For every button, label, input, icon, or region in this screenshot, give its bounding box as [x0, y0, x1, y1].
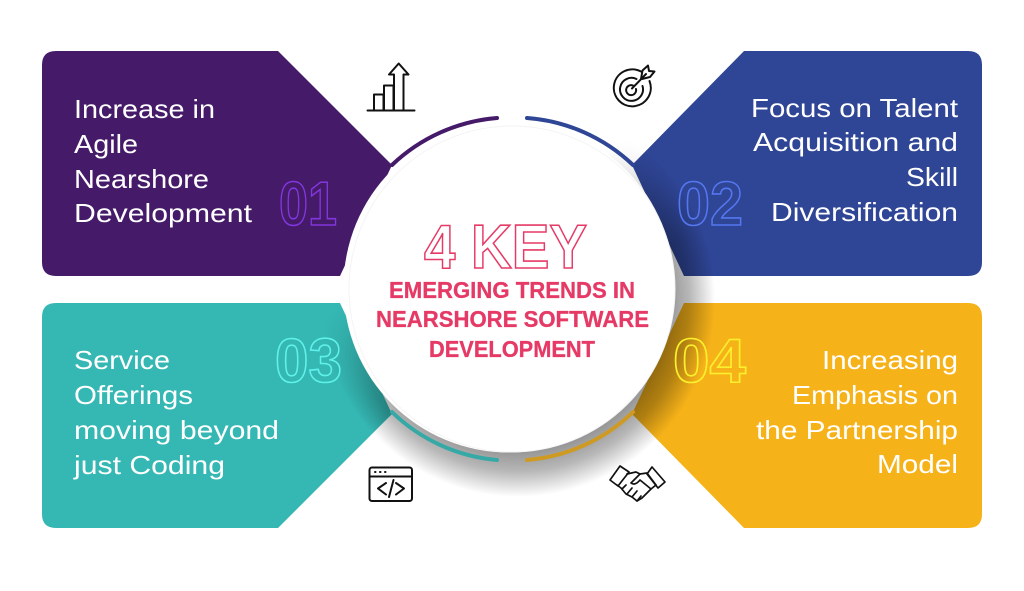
- number 03: 03: [275, 327, 342, 396]
- text: trend 04: Model: [877, 449, 958, 479]
- text: trend 01: [74, 94, 253, 228]
- panel: trend 02 blue: [632, 51, 982, 276]
- icon: target: [614, 66, 654, 106]
- text: trend 02: Skill: [906, 162, 958, 192]
- text: trend 02: Focus on Talent: [751, 93, 959, 123]
- center circle: [344, 122, 674, 452]
- text: trend 01: Agile: [74, 129, 138, 159]
- icon: handshake: [610, 466, 665, 501]
- inner circle ring: [349, 126, 675, 452]
- text: trend 02: Diversification: [771, 197, 958, 227]
- panel: trend 01 purple: [42, 51, 392, 276]
- text: trend 03: just Coding: [73, 450, 225, 480]
- icon: growth chart: [368, 64, 414, 110]
- heading: emerging trends: NEARSHORE SOFTWARE: [376, 306, 649, 332]
- icon: code window: [370, 468, 412, 501]
- circle shadow: [341, 158, 712, 494]
- text: trend 02: Acquisition and: [753, 127, 958, 157]
- number 01: 01: [279, 170, 337, 239]
- title: 4 KEY: 4 KEY: [424, 213, 587, 282]
- text: trend 01: Nearshore: [74, 164, 209, 194]
- heading: emerging trends: DEVELOPMENT: [429, 336, 595, 362]
- text: trend 01: Development: [74, 198, 253, 228]
- number 04: 04: [673, 327, 747, 396]
- heading: emerging trends: EMERGING TRENDS IN: [389, 277, 635, 303]
- text: trend 03: Offerings: [74, 380, 193, 410]
- text: trend 02: [751, 93, 959, 227]
- text: trend 04: [756, 345, 958, 479]
- text: trend 01: Increase in: [74, 94, 215, 124]
- arc: purple: [392, 118, 497, 165]
- arc: teal: [392, 412, 497, 460]
- text: trend 04: Increasing: [822, 345, 958, 375]
- panel: trend 03 teal: [42, 303, 392, 528]
- arc: blue: [527, 118, 633, 165]
- text: trend 03: Service: [74, 345, 170, 375]
- text: trend 04: Emphasis on: [792, 380, 958, 410]
- panel: trend 04 yellow: [632, 303, 982, 528]
- heading: emerging trends: [376, 277, 649, 362]
- text: trend 03: moving beyond: [74, 415, 279, 445]
- text: trend 04: the Partnership: [756, 415, 958, 445]
- arc: yellow: [527, 412, 633, 460]
- number 02: 02: [677, 170, 743, 239]
- text: trend 03: [73, 345, 279, 480]
